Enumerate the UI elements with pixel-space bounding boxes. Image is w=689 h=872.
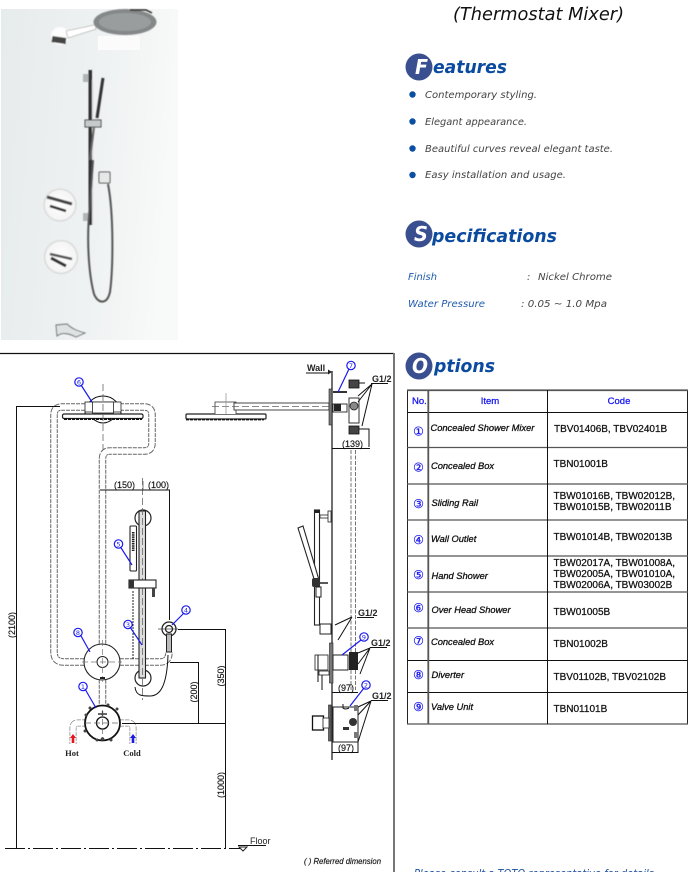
side view: valve unit <box>312 681 392 753</box>
options table: ⑨ <box>413 700 424 714</box>
options table: ④ <box>413 533 424 547</box>
side view: sliding rail and hand shower <box>298 510 378 640</box>
options table: ② <box>413 460 424 474</box>
front view: dimensions: (2100) <box>7 612 17 638</box>
feature list: Easy installation and usage. <box>425 170 566 181</box>
panel: product photo <box>1 9 178 340</box>
specifications text: : 0.05 ~ 1.0 Mpa <box>521 299 607 310</box>
options table: TBW02017A, TBW01008A, <box>554 558 675 569</box>
heading: Options: ptions <box>433 356 495 377</box>
side view: sliding rail and hand shower: G1/2 <box>358 608 378 618</box>
specifications text: Nickel Chrome <box>538 272 612 283</box>
side view: concealed box <box>332 361 392 449</box>
options table: TBN01101B <box>554 704 608 715</box>
options table: TBW01016B, TBW02012B, <box>554 491 675 502</box>
front view: concealed pipes <box>54 407 169 705</box>
heading: Options: O <box>412 354 428 378</box>
floor mark <box>238 836 271 851</box>
icon: bath spout <box>56 324 85 337</box>
options table: TBW01005B <box>554 607 611 618</box>
side view: wall and pipe <box>306 363 356 760</box>
side view: overhead shower arm <box>186 389 332 425</box>
options table: Hand Shower <box>432 571 489 581</box>
heading: Features: eatures <box>433 57 507 78</box>
front view: part balloons: 6 <box>77 378 81 386</box>
options table: Wall Outlet <box>431 534 477 544</box>
options table: Code <box>608 396 630 407</box>
specifications text: Finish <box>408 272 437 283</box>
options table: ③ <box>413 497 424 511</box>
front view: part balloons: 4 <box>184 606 188 614</box>
options table: TBV01406B, TBV02401B <box>554 424 668 435</box>
icon: overhead shower <box>51 9 156 45</box>
options table <box>407 390 688 724</box>
heading: Specifications: pecifications <box>431 226 557 247</box>
options table: Concealed Shower Mixer <box>430 423 535 433</box>
specifications text: Water Pressure <box>408 299 485 310</box>
front view: part balloons: 5 <box>116 540 121 548</box>
title: (Thermostat Mixer) <box>453 4 624 25</box>
front view: hand shower and sliding rail <box>129 478 168 700</box>
options table: TBW01014B, TBW02013B <box>554 532 673 543</box>
side view: concealed box: G1/2 <box>372 374 392 384</box>
floor mark: Floor <box>250 836 271 846</box>
options table: Concealed Box <box>431 461 494 471</box>
icon: control knob lower <box>44 240 78 274</box>
options table: TBN01001B <box>554 459 608 470</box>
options table: Over Head Shower <box>432 605 511 615</box>
front view: dimensions: (200) <box>189 681 199 703</box>
heading: Features: F <box>415 55 428 79</box>
options table: ⑧ <box>413 668 424 682</box>
options table: No. <box>412 396 427 407</box>
side view: diverter: G1/2 <box>371 638 391 648</box>
front view: hot and cold supply: Cold <box>123 748 141 758</box>
options table: TBV01102B, TBV02102B <box>554 672 666 683</box>
side view: valve unit: 2 <box>364 682 368 690</box>
front view: part balloons <box>74 378 190 708</box>
options table: ⑤ <box>413 568 424 582</box>
front view: dimensions: (100) <box>148 480 169 490</box>
front view: part balloons: 3 <box>126 621 130 629</box>
side view: valve unit: (97) <box>338 743 354 753</box>
icon: hose and wall outlet <box>88 160 112 302</box>
options table: Item <box>481 396 499 407</box>
options table: Concealed Box <box>431 637 494 647</box>
feature list: Beautiful curves reveal elegant taste. <box>425 144 613 155</box>
feature list: Elegant appearance. <box>425 117 527 128</box>
front view: diverter <box>82 640 122 684</box>
front view: wall outlet <box>158 622 178 652</box>
panel: technical drawing <box>0 353 394 872</box>
heading: Specifications: S <box>414 222 428 246</box>
icon: sliding rail and hand shower <box>83 70 103 225</box>
side view: concealed box: (139) <box>342 439 363 449</box>
front view: valve unit <box>84 704 120 742</box>
options table: ① <box>413 424 424 438</box>
side view: concealed box: 7 <box>349 362 353 370</box>
options table: ⑦ <box>413 634 424 648</box>
options table: TBW02006A, TBW03002B <box>554 580 673 591</box>
front view: overhead shower <box>62 384 143 450</box>
heading: Options <box>406 352 495 380</box>
front view: dimensions: (350) <box>216 665 226 687</box>
feature list <box>409 90 613 181</box>
heading: Specifications <box>406 220 557 248</box>
specifications text: : <box>527 272 530 283</box>
options table: TBW02005A, TBW01010A, <box>554 569 675 580</box>
side view: diverter: 9 <box>362 634 366 642</box>
front view: part balloons: 8 <box>76 629 80 637</box>
side view: diverter <box>315 633 391 693</box>
options table: Diverter <box>432 670 465 680</box>
referred dimension note: ( ) Referred dimension <box>304 857 382 866</box>
front view: hot and cold supply: Hot <box>65 748 79 758</box>
options table: ⑥ <box>413 601 424 615</box>
specifications text <box>408 272 612 310</box>
side view: valve unit: G1/2 <box>372 691 392 701</box>
front view: dimensions: (150) <box>114 480 135 490</box>
front view: hot and cold supply <box>65 723 141 758</box>
front view: dimensions: (1000) <box>216 772 226 798</box>
options table: TBN01002B <box>554 639 608 650</box>
side view: wall and pipe: Wall <box>307 363 325 373</box>
icon: control knob upper <box>44 188 76 222</box>
side view: diverter: (97) <box>338 683 354 693</box>
options table: TBW01015B, TBW02011B <box>554 502 672 513</box>
options table: Sliding Rail <box>432 498 479 508</box>
options table: Valve Unit <box>431 702 473 712</box>
heading: Features <box>406 54 507 80</box>
front view: dimensions <box>5 406 240 848</box>
front view: part balloons: 1 <box>81 683 85 691</box>
feature list: Contemporary styling. <box>425 90 537 101</box>
